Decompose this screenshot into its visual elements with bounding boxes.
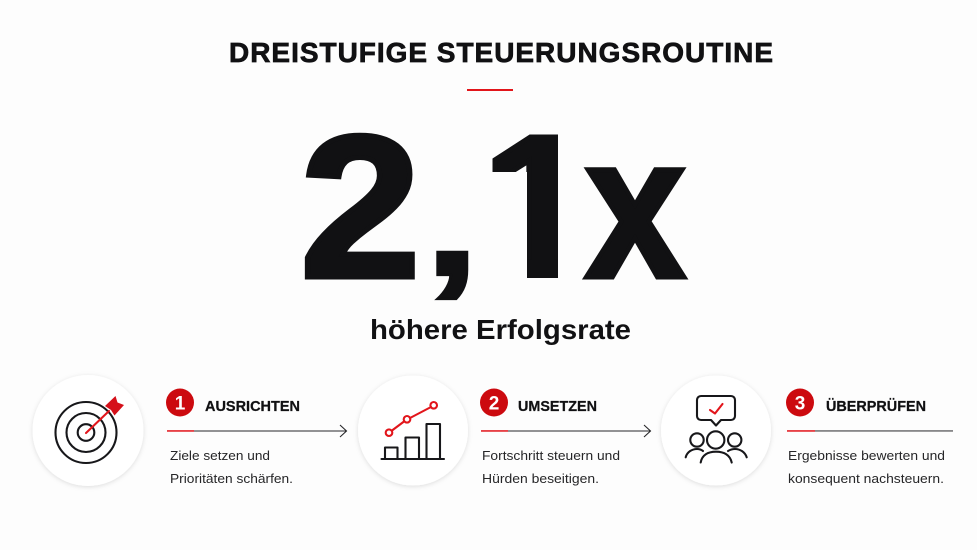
step 2: umsetzen — [358, 376, 650, 486]
description 1: Ziele setzen und — [170, 448, 270, 463]
big number: 1 — [481, 93, 595, 322]
arrow 2 — [481, 425, 650, 437]
rule 3 — [787, 430, 953, 432]
heading: umsetzen: UMSETZEN — [518, 399, 597, 415]
step 1: ausrichten — [32, 375, 346, 486]
big number: 2 — [300, 94, 421, 320]
icon: target with dart — [32, 375, 144, 486]
description 3 — [788, 448, 945, 486]
badge 1 — [166, 388, 194, 416]
description 3: konsequent nachsteuern. — [788, 471, 944, 486]
big number: x — [585, 93, 685, 320]
subtitle: höhere Erfolgsrate — [370, 314, 631, 345]
badge 2: 2 — [489, 394, 499, 414]
step 3: überprüfen — [661, 376, 953, 486]
big number: , — [424, 134, 480, 308]
icon: team with speech bubble — [661, 376, 771, 486]
title: DREISTUFIGE STEUERUNGSROUTINE — [229, 37, 773, 68]
description 1 — [170, 448, 293, 486]
description 2: Hürden beseitigen. — [482, 471, 599, 486]
badge 3: 3 — [795, 394, 805, 414]
heading: überprüfen: ÜBERPRÜFEN — [826, 398, 926, 415]
description 2: Fortschritt steuern und — [482, 448, 620, 463]
icon: rising bar chart — [358, 376, 468, 486]
description 1: Prioritäten schärfen. — [170, 471, 293, 486]
description 3: Ergebnisse bewerten und — [788, 448, 945, 463]
badge 3 — [786, 388, 814, 416]
description 2 — [482, 448, 620, 486]
arrow 1 — [167, 425, 346, 437]
big number — [304, 132, 688, 300]
red accent rule — [467, 89, 513, 91]
heading: ausrichten: AUSRICHTEN — [205, 399, 300, 415]
badge 1: 1 — [175, 394, 186, 414]
badge 2 — [480, 388, 508, 416]
